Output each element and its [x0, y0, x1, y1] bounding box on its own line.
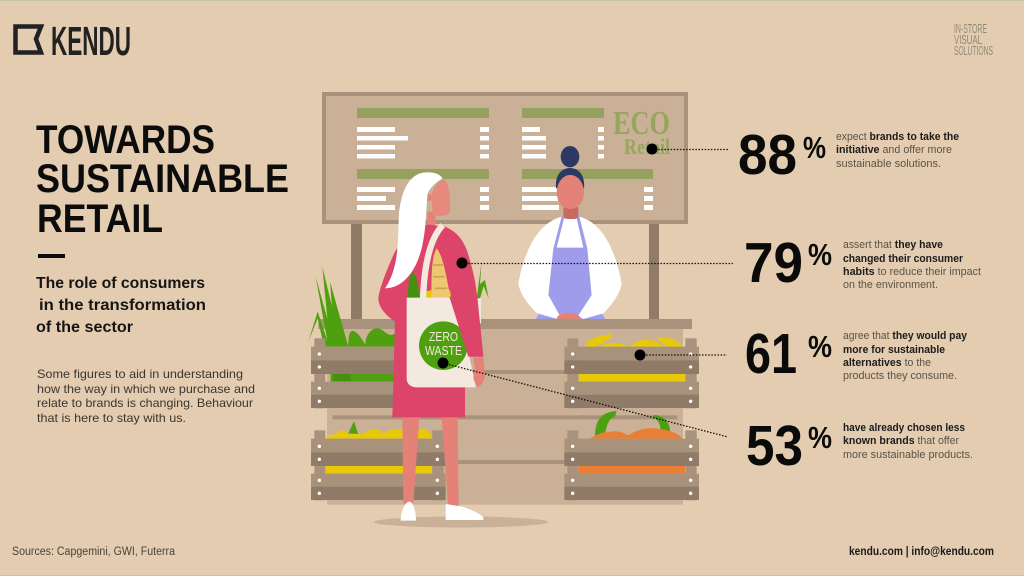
stat: 61%: products they consume. [843, 370, 957, 382]
title: RETAIL [37, 197, 163, 241]
tagline: in-store visual solutions [954, 22, 993, 58]
stat: 79% [744, 231, 981, 295]
illustration: retail stall [308, 94, 699, 528]
stat: 61%: more for sustainable [843, 344, 945, 356]
grass behind counter [477, 262, 489, 298]
stat: 88%: 88 [738, 123, 797, 187]
neck and head [427, 212, 435, 226]
stat: 88%: expect brands to take the [836, 131, 959, 143]
eco retail sign: Retail [624, 134, 670, 159]
hand [473, 357, 485, 387]
logo: Kendu [16, 18, 131, 64]
stat: 88%: sustainable solutions. [836, 158, 941, 170]
bag [407, 298, 476, 387]
leader lines [443, 150, 733, 437]
stat: 61%: agree that they would pay [843, 330, 968, 342]
customer [378, 172, 485, 521]
stat: 53%: more sustainable products. [843, 449, 973, 461]
bag label [425, 330, 462, 358]
bag label: WASTE [425, 344, 462, 358]
produce: peppers and pumpkins [579, 411, 685, 474]
crate: bottom right [564, 430, 699, 500]
tagline: in-store visual solutions: IN-STORE [954, 22, 987, 36]
stat: 61% [745, 322, 968, 386]
intro text: Some figures to aid in understanding [37, 367, 243, 381]
contact: kendu.com | info@kendu.com [849, 546, 994, 558]
stat: 79%: changed their consumer [843, 253, 964, 265]
stat: 79%: % [808, 237, 832, 272]
intro text: how the way in which we purchase and [37, 382, 255, 396]
bag back panel [476, 298, 481, 323]
zero waste badge [419, 321, 468, 370]
sleeve [449, 297, 483, 357]
crate: top left [311, 338, 446, 408]
title divider [38, 254, 65, 258]
subtitle: of the sector [36, 319, 133, 336]
produce: yellow top right [579, 334, 685, 382]
stat: 61%: alternatives to the [843, 357, 931, 369]
counter [318, 319, 692, 505]
floor shadow [374, 516, 548, 528]
stat: 53%: known brands that offer [843, 435, 959, 447]
menu board [324, 94, 686, 222]
stat: 79%: 79 [744, 231, 803, 295]
intro text: that is here to stay with us. [37, 411, 186, 425]
produce: greens [308, 267, 395, 382]
stat: 88%: initiative and offer more [836, 144, 952, 156]
eco retail sign: ECO [613, 105, 670, 142]
stat: 53% [746, 414, 973, 478]
subtitle: in the transformation [39, 297, 206, 314]
stat: 53%: 53 [746, 414, 803, 478]
bag strap [423, 225, 443, 300]
title [36, 118, 289, 241]
stat: 88%: % [803, 130, 826, 165]
stat: 61%: % [808, 329, 832, 364]
crate: top right [564, 338, 699, 408]
legs [402, 417, 419, 503]
people and stall drawn in 3x coordinates [308, 146, 699, 521]
subtitle: The role of consumers [36, 275, 205, 292]
intro text: relate to brands is changing. Behaviour [37, 396, 253, 410]
menu board posts [351, 224, 659, 320]
stat: 61%: 61 [745, 322, 797, 386]
subtitle [36, 275, 206, 336]
stat: 79%: on the environment. [843, 279, 938, 291]
title: SUSTAINABLE [36, 157, 289, 201]
dress [378, 224, 483, 417]
bag label: ZERO [429, 330, 458, 344]
stat: 79%: assert that they have [843, 239, 943, 251]
title: TOWARDS [36, 118, 215, 162]
intro text [37, 367, 255, 425]
stat: 79%: habits to reduce their impact [843, 266, 981, 278]
stat: 88% [738, 123, 959, 187]
crate: bottom left [311, 430, 446, 500]
eco retail sign [613, 105, 670, 159]
sources: Sources: Capgemini, GWI, Futerra [12, 546, 176, 558]
logo: Kendu: KENDU [51, 18, 131, 64]
shoes [401, 502, 416, 521]
produce: lemons [325, 428, 432, 474]
stat: 53%: % [808, 420, 832, 455]
leader dots [438, 144, 658, 368]
hair [385, 172, 443, 288]
shopkeeper [518, 146, 622, 325]
bag contents [408, 272, 419, 300]
stat: 53%: have already chosen less [843, 422, 965, 434]
tagline: in-store visual solutions: VISUAL [954, 33, 982, 47]
